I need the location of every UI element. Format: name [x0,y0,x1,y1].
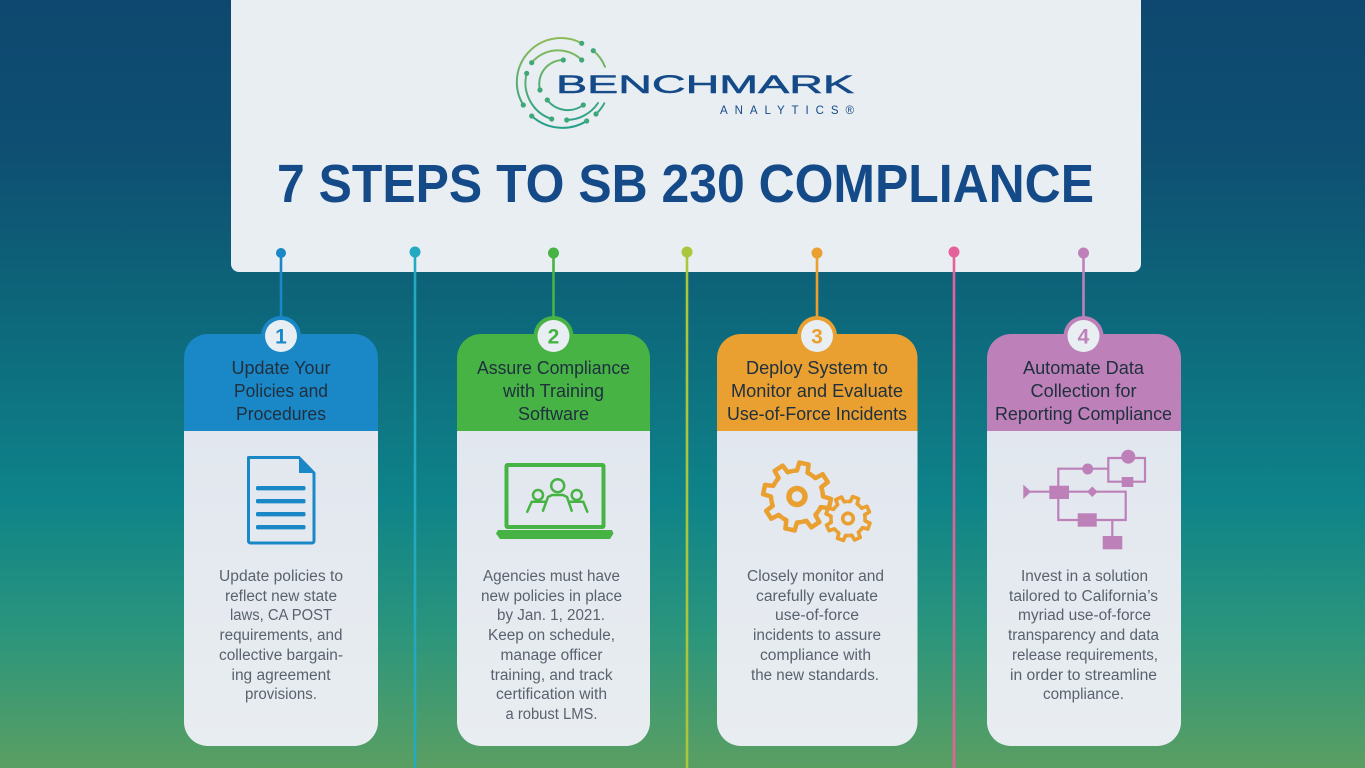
step description: use-of-force [775,607,859,624]
title: 7 STEPS TO SB 230 COMPLIANCE [277,155,1094,214]
connector: pink line [948,246,960,768]
step description: manage officer [500,647,602,664]
step number: 1 [275,326,287,348]
step description: compliance with [760,647,871,664]
step description: Invest in a solution [1021,568,1148,585]
step description: compliance. [1043,686,1124,703]
step description [747,568,884,684]
icon: laptop with people [496,465,614,539]
panel: step 3 [717,248,918,746]
logo wordmark: BENCHMARK [556,71,855,99]
panel: step 4 [987,248,1181,746]
panel: step 1 [184,248,378,746]
step description: in order to streamline [1010,667,1157,684]
step description: new policies in place [481,588,622,605]
step description: provisions. [245,686,317,703]
step heading: Reporting Compliance [995,403,1172,424]
connector: lime line [682,246,692,768]
step heading: Use-of-Force Incidents [727,403,907,424]
step number: 2 [548,326,559,348]
icon: process flow diagram [1023,450,1145,549]
connector: teal line [410,246,420,768]
step description [481,568,622,723]
step description: tailored to California’s [1009,588,1158,605]
step description: carefully evaluate [756,588,878,605]
step heading [727,357,907,424]
step description: requirements, and [220,627,342,644]
step description: Closely monitor and [747,568,884,585]
step heading [995,357,1172,424]
step description: Update policies to [219,568,343,585]
step heading: Procedures [236,403,326,424]
step heading: Update Your [232,357,330,378]
panel: header [231,0,1141,272]
step description: incidents to assure [753,627,881,644]
step description: release requirements, [1012,647,1158,664]
step number: 4 [1078,326,1090,348]
logo subline: ANALYTICS® [720,105,855,117]
step heading: Automate Data [1023,357,1145,378]
step description: a robust LMS. [506,706,598,723]
step description: laws, CA POST [230,607,333,624]
step description: Keep on schedule, [488,627,615,644]
step description: by Jan. 1, 2021. [497,607,605,624]
step heading: Collection for [1030,380,1136,401]
step heading: Monitor and Evaluate [731,380,903,401]
logo icon: circuit rings [517,38,605,128]
panel: step 2 [457,248,650,746]
step number: 3 [811,326,823,348]
step heading: Deploy System to [746,357,888,378]
step description [219,568,343,703]
step heading: Assure Compliance [477,357,630,378]
step description: collective bargain- [219,647,343,664]
step heading: Software [518,403,589,424]
step description: ing agreement [232,667,331,684]
step description: training, and track [490,667,613,684]
step description: Agencies must have [483,568,620,585]
step description: reflect new state [225,588,337,605]
step description: transparency and data [1008,627,1159,644]
step description: the new standards. [751,667,879,684]
step heading: with Training [502,380,604,401]
icon: document [248,458,314,543]
step description [1008,568,1159,703]
step description: certification with [496,686,607,703]
logo: Benchmark Analytics [517,38,855,128]
step description: myriad use-of-force [1018,607,1151,624]
step heading [477,357,630,424]
icon: gears [757,457,876,547]
step heading: Policies and [234,380,328,401]
step heading [232,357,330,424]
